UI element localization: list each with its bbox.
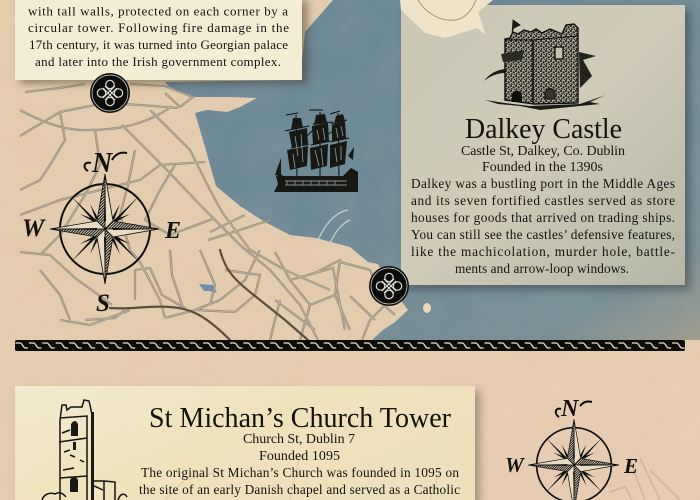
address: Church St, Dublin 7	[243, 432, 355, 447]
body text: ments and arrow-loop windows.	[455, 261, 629, 276]
body text: the site of an early Danish chapel and served as a Catholic	[139, 482, 460, 497]
icon: Celtic knot marker Dalkey	[369, 266, 409, 306]
icon: Celtic knot marker Dublin	[90, 73, 130, 113]
icon: ship	[274, 110, 358, 192]
body text: The original St Michan’s Church was founded in 1095 on	[141, 465, 459, 480]
faint map lines: lower right	[610, 458, 680, 500]
heading: St Michan's Church Tower: St Michan’s Church Tower	[149, 403, 452, 434]
body text: houses for goods that arrived on trading ships.	[411, 210, 675, 225]
panel: St Michan's Church Tower	[15, 386, 480, 500]
heading: Dalkey Castle: Dalkey Castle	[465, 114, 622, 145]
panel: Dublin Castle text: and later into the Irish government complex.	[35, 54, 281, 69]
faint map lines in panel	[165, 455, 440, 500]
divider: rope	[15, 340, 685, 351]
body text: and its seven fortified castles served as store	[411, 193, 675, 208]
map: sea	[160, 0, 700, 340]
panel: Dalkey Castle	[400, 0, 690, 290]
compass: map: W	[22, 215, 46, 242]
compass: map: E	[164, 218, 181, 244]
panel: Dublin Castle text: with tall walls, protected on each corner by a	[28, 4, 288, 18]
map: road network	[20, 84, 395, 340]
panel: Dublin Castle text: 17th century, it was turned into Georgian palace	[29, 37, 288, 52]
icon: church tower	[42, 400, 127, 500]
map: land seen through panel	[400, 0, 493, 38]
body text	[411, 176, 675, 276]
panel: Dublin Castle text: circular tower. Following fire damage in the	[28, 20, 289, 35]
founded date: Founded 1095	[259, 449, 340, 464]
panel: Dublin Castle text	[15, 0, 308, 84]
compass: lower right: N	[560, 396, 580, 422]
compass: map: S	[96, 290, 110, 317]
compass: lower right	[505, 396, 638, 500]
body text	[139, 465, 460, 497]
address: Castle St, Dalkey, Co. Dublin	[461, 144, 625, 159]
compass: lower right: E	[623, 454, 638, 478]
body text: Dalkey was a bustling port in the Middle Ages	[411, 176, 675, 191]
compass: map	[22, 148, 181, 317]
body text: You can still see the castles’ defensive features,	[411, 227, 675, 242]
compass: map: N	[91, 148, 114, 179]
map: dark motorway	[110, 250, 308, 340]
compass: lower right: W	[505, 453, 525, 477]
founded date: Founded in the 1390s	[482, 160, 603, 175]
icon: Dalkey Castle tower	[484, 20, 606, 110]
body text: like the machicolation, murder hole, battle-	[411, 244, 675, 259]
